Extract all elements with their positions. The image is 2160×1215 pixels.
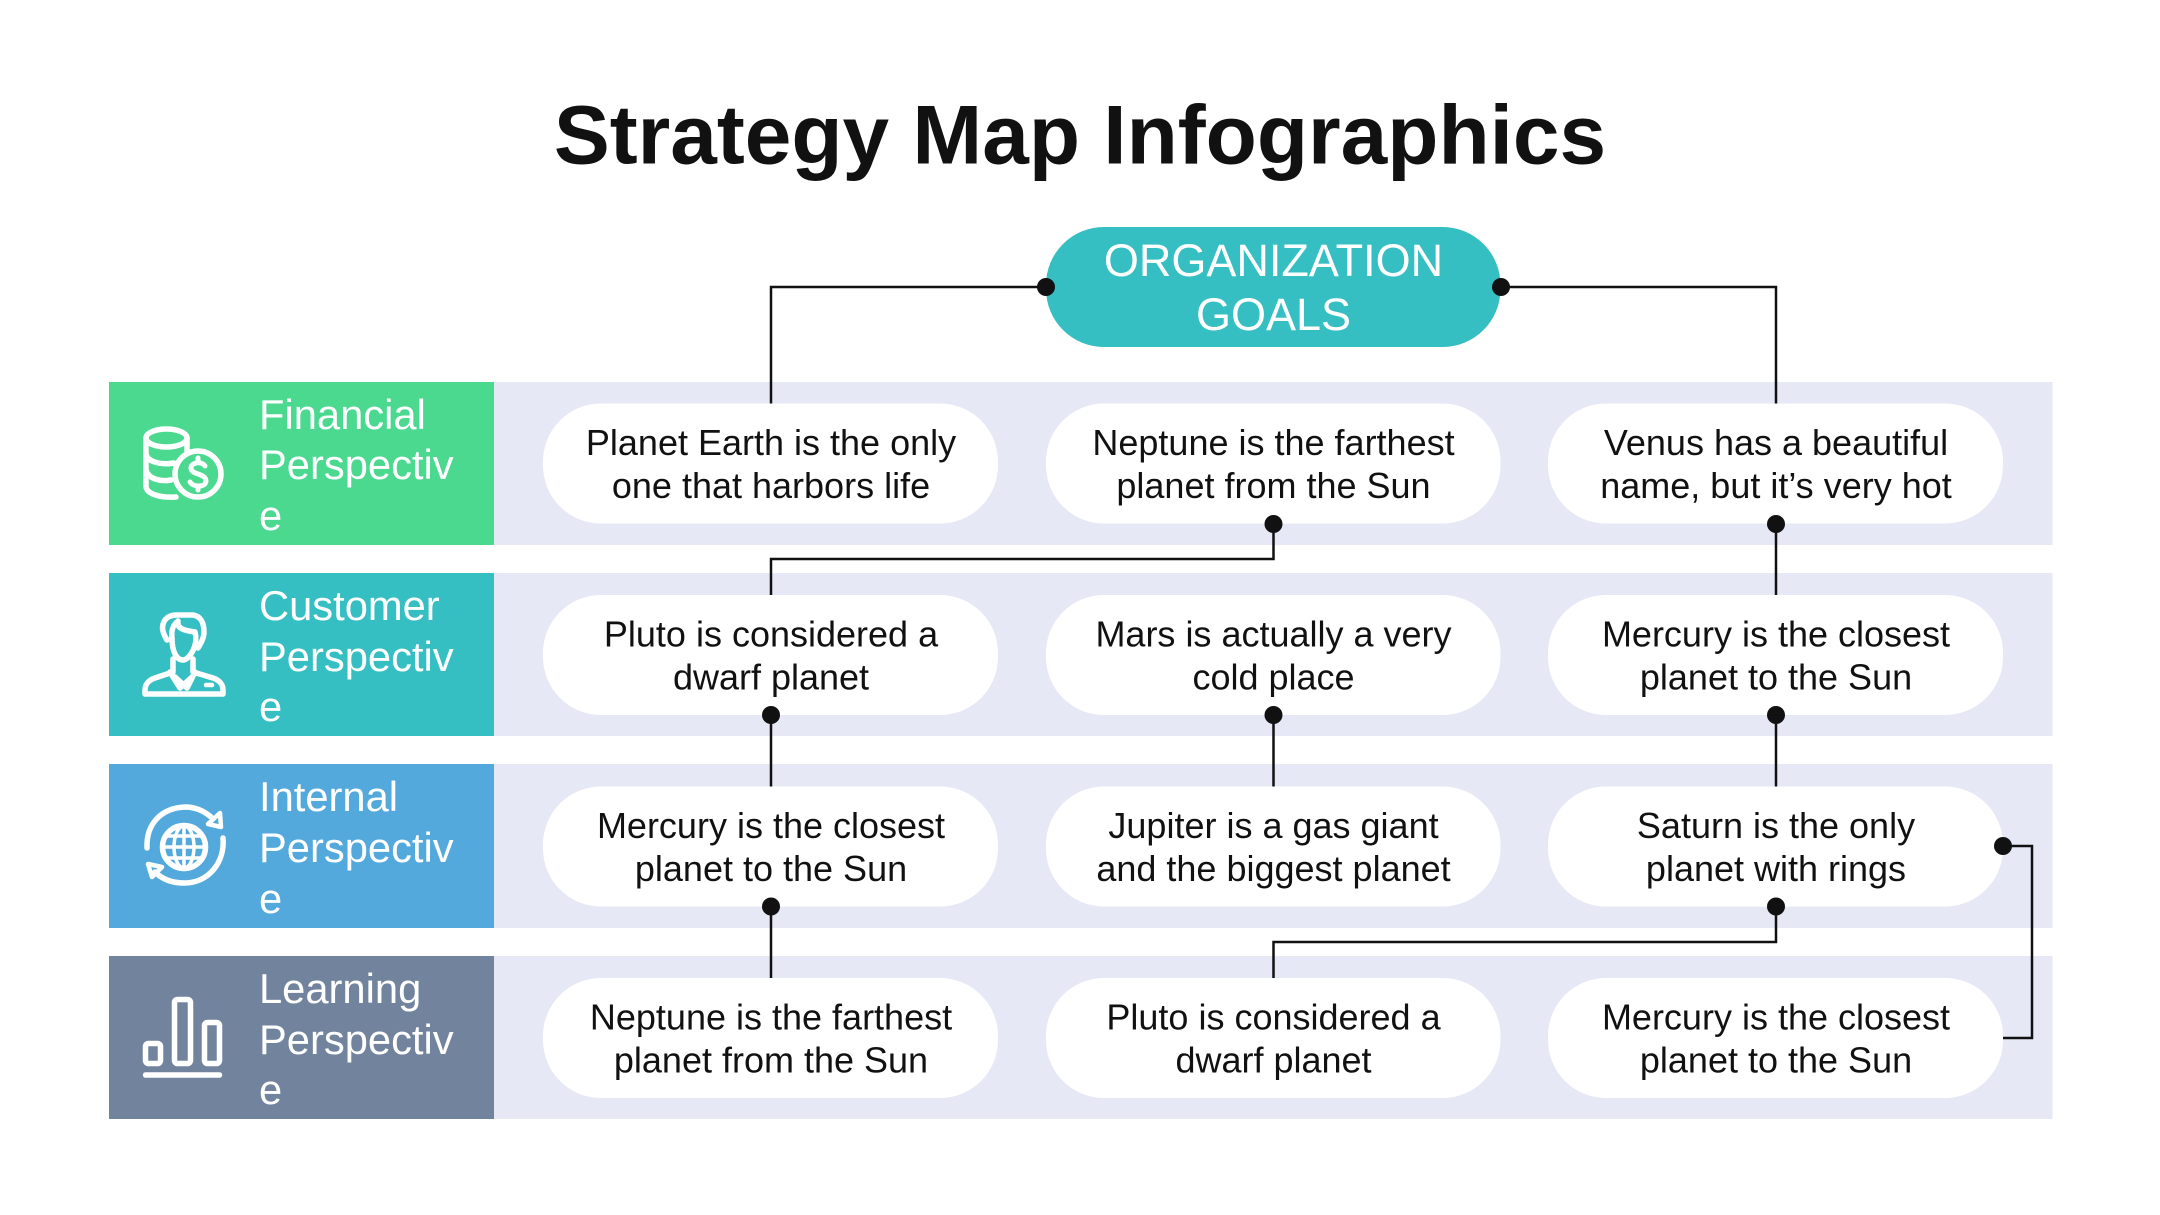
panel: internal row background <box>494 764 2052 928</box>
label: customer perspective: Customer <box>259 582 440 629</box>
pill: pluto <box>543 595 998 715</box>
icon: coins with dollar <box>146 429 221 497</box>
heading pill: organization goals: ORGANIZATION <box>1104 235 1443 286</box>
pill: pluto: Pluto is considered a <box>604 614 939 654</box>
connector: pluto to mercury <box>762 706 780 786</box>
pill: mercury internal: planet to the Sun <box>635 848 907 889</box>
pill: neptune learning <box>543 978 998 1098</box>
label: internal perspective: Internal <box>259 773 398 820</box>
pill: neptune learning: Neptune is the farthest <box>590 996 952 1038</box>
connector: saturn to pluto <box>1274 898 1785 978</box>
connector: neptune to pluto <box>771 515 1282 595</box>
heading pill: organization goals: GOALS <box>1196 289 1351 340</box>
label: learning perspective: Learning <box>259 965 421 1012</box>
pill: mercury customer: planet to the Sun <box>1640 656 1912 698</box>
pill: venus <box>1548 404 2003 524</box>
pill: earth: Planet Earth is the only <box>586 422 956 463</box>
label: financial perspective <box>109 382 494 545</box>
pill: neptune learning: planet from the Sun <box>614 1040 928 1080</box>
panel: learning row background <box>494 956 2052 1119</box>
pill: neptune farthest: Neptune is the farthest <box>1092 422 1455 463</box>
pill: mars: Mars is actually a very <box>1095 614 1452 654</box>
icon: globe with rotating arrows <box>147 807 223 883</box>
pill: pluto learning <box>1046 978 1500 1098</box>
label: learning perspective: Perspectiv <box>259 1016 454 1063</box>
label: internal perspective: Perspectiv <box>259 824 454 871</box>
pill: jupiter: and the biggest planet <box>1096 848 1451 889</box>
pill: mercury customer: Mercury is the closest <box>1602 614 1950 654</box>
label: customer perspective: e <box>259 683 282 730</box>
label: customer perspective: Perspectiv <box>259 633 454 680</box>
pill: pluto learning: dwarf planet <box>1175 1040 1372 1080</box>
connector: mercury to saturn <box>1767 706 1785 786</box>
label: financial perspective: Financial <box>259 391 426 438</box>
pill: mercury internal <box>543 786 998 906</box>
pill: earth: one that harbors life <box>612 465 930 506</box>
pill: saturn <box>1548 786 2003 906</box>
icon: person in suit <box>145 615 223 694</box>
pill: mercury learning <box>1548 978 2003 1098</box>
pill: mercury customer <box>1548 595 2003 715</box>
panel: financial row background <box>494 382 2052 545</box>
pill: neptune farthest <box>1046 404 1500 524</box>
label: learning perspective: e <box>259 1066 282 1113</box>
label: financial perspective: e <box>259 492 282 539</box>
pill: mars: cold place <box>1192 656 1355 698</box>
title: Strategy Map Infographics <box>554 88 1606 182</box>
label: financial perspective: Perspectiv <box>259 441 454 488</box>
connector: mars to jupiter <box>1264 706 1282 786</box>
pill: mercury learning: planet to the Sun <box>1640 1040 1912 1080</box>
connector: mercury to neptune <box>762 898 780 978</box>
label: customer perspective <box>109 573 494 736</box>
label: learning perspective <box>109 956 494 1119</box>
pill: pluto: dwarf planet <box>673 656 869 698</box>
connector: goals to earth <box>771 278 1055 404</box>
icon: bar chart <box>146 1000 220 1075</box>
connector: saturn to mercury <box>1994 837 2032 1038</box>
pill: earth <box>543 404 998 524</box>
pill: mercury learning: Mercury is the closest <box>1602 996 1950 1038</box>
pill: jupiter <box>1046 786 1500 906</box>
heading pill: organization goals <box>1046 227 1500 347</box>
pill: venus: name, but it’s very hot <box>1600 465 1952 506</box>
pill: venus: Venus has a beautiful <box>1604 422 1948 463</box>
pill: saturn: Saturn is the only <box>1637 805 1915 846</box>
pill: saturn: planet with rings <box>1646 848 1906 889</box>
pill: jupiter: Jupiter is a gas giant <box>1108 805 1439 846</box>
pill: pluto learning: Pluto is considered a <box>1106 996 1442 1038</box>
panel: customer row background <box>494 573 2052 736</box>
connector: venus to mercury <box>1767 515 1785 595</box>
pill: mercury internal: Mercury is the closest <box>597 805 945 846</box>
pill: mars <box>1046 595 1500 715</box>
label: internal perspective <box>109 764 494 928</box>
connector: goals to venus <box>1492 278 1776 404</box>
pill: neptune farthest: planet from the Sun <box>1116 465 1431 506</box>
label: internal perspective: e <box>259 875 282 922</box>
